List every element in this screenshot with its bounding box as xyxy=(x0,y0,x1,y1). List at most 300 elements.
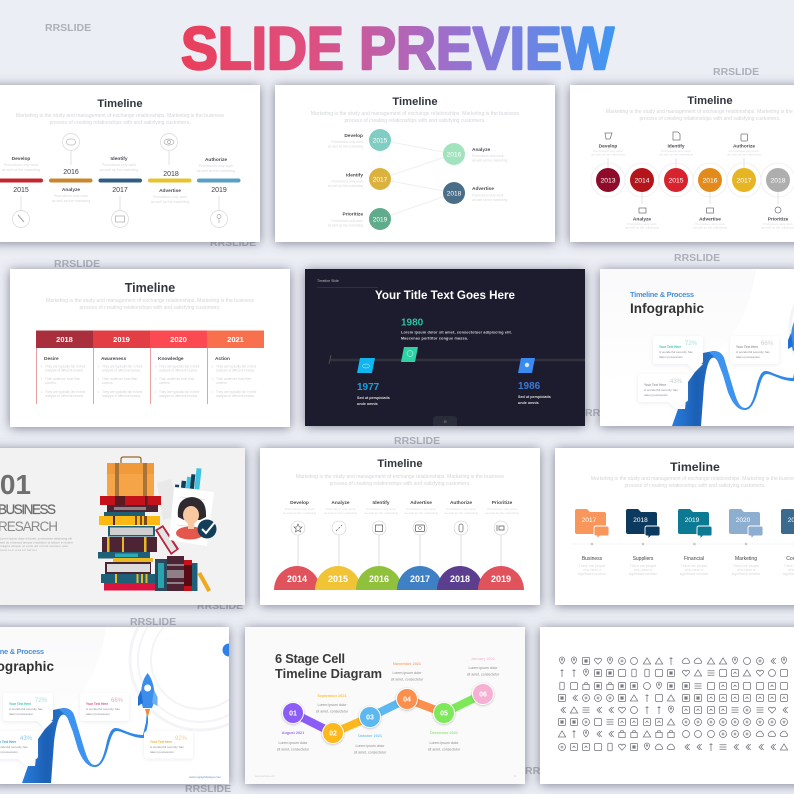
column: awareness xyxy=(98,356,144,398)
watermarks: RRSLIDE xyxy=(585,407,631,419)
illustration: book stack xyxy=(98,496,161,590)
callout: 66 percent: taken possession xyxy=(736,355,760,359)
callout: 43 percent: A wonderful serenity has xyxy=(644,388,678,392)
icon row 8 xyxy=(558,743,788,751)
month captions xyxy=(277,657,500,754)
stage labels: Authorize xyxy=(205,157,227,163)
column dividers xyxy=(36,348,208,404)
stage labels: Authorize xyxy=(450,500,472,506)
month captions: Lorem ipsum dolor xyxy=(279,741,308,745)
numbered nodes: 04 xyxy=(403,696,411,704)
month captions: Lorem ipsum dolor xyxy=(318,703,347,707)
panel: six stage cell diagram xyxy=(245,627,525,784)
subtitle text: process of creating relationships with and satisfying customers. xyxy=(79,305,221,311)
callout: 92 percent: A wonderful serenity has xyxy=(150,745,184,749)
month captions: Lorem ipsum dolor xyxy=(356,744,385,748)
stage labels: as well as the marketing xyxy=(404,511,438,515)
slide tag: Timeline Slide xyxy=(317,279,339,283)
dotted axis xyxy=(572,543,794,545)
callout: 66 percent: 66% xyxy=(761,341,774,347)
years: 2019 xyxy=(211,187,227,194)
labels and small icons: Promotions only work xyxy=(593,149,623,153)
folder labels: Marketing xyxy=(735,556,757,562)
callout: 43 percent: Your Text Here xyxy=(644,383,666,387)
year header bar: 2018 xyxy=(56,335,73,344)
column: knowledge: analysis of different brands. xyxy=(159,368,198,372)
milestone 1986: unde omnis xyxy=(518,401,539,405)
watermarks: RRSLIDE xyxy=(394,435,440,447)
semicircle years xyxy=(274,566,524,590)
callout: 66 percent: 66% xyxy=(111,698,124,704)
left labels: Prioritize xyxy=(342,212,363,218)
pale background shape xyxy=(0,473,107,743)
illustration: briefcase xyxy=(107,457,154,496)
watermarks: RRSLIDE xyxy=(54,258,100,270)
watermarks: RRSLIDE xyxy=(674,252,720,264)
coloured timeline bars xyxy=(0,178,240,182)
subtitle text: process of creating relationships with and satisfying customers. xyxy=(639,116,781,122)
column: desire: They are typically fair in their xyxy=(45,390,87,394)
heading: infographic: Infographic xyxy=(630,301,704,316)
subtitle text: Marketing is the study and management of exchange relationships. Marketing is the business xyxy=(46,298,255,304)
folder labels: There are people xyxy=(579,564,605,568)
folder labels: who have a xyxy=(685,568,703,572)
milestone 1980: Maecenas porttitor congue massa. xyxy=(401,336,468,340)
month captions: November 2021 xyxy=(393,662,421,666)
years: 2018 xyxy=(163,171,179,178)
numbered nodes: 01 xyxy=(289,710,297,718)
right labels: as well as the marketing xyxy=(472,198,508,202)
column: action: They are typically fair in their xyxy=(216,364,258,368)
column: action: content. xyxy=(216,381,227,385)
stage labels: Promotions only work xyxy=(406,507,436,511)
semicircle years: 2016 xyxy=(369,574,389,584)
callout: 43 percent xyxy=(638,378,689,409)
column: knowledge: content. xyxy=(159,381,170,385)
month captions: August 2021 xyxy=(282,731,304,735)
column: awareness: Their audience trust their xyxy=(102,377,138,381)
footer text xyxy=(255,775,517,778)
folder 2020 xyxy=(729,509,763,545)
column: awareness: They are typically fair in their xyxy=(102,364,144,368)
stage labels: Prioritize xyxy=(492,500,513,506)
milestone 1977: Sed ut perspiciatis xyxy=(357,396,390,400)
folder labels: who have a xyxy=(737,568,755,572)
background rings xyxy=(788,304,794,356)
column: knowledge: analysis of different brands. xyxy=(159,394,198,398)
blue corner dot xyxy=(222,644,229,656)
page tab xyxy=(433,416,457,426)
column: knowledge: Knowledge xyxy=(158,356,184,362)
diagram heading xyxy=(275,651,382,681)
column: desire: They are typically fair in their xyxy=(45,364,87,368)
stage labels: Develop xyxy=(12,156,30,162)
labels and small icons: Promotions only work xyxy=(627,222,657,226)
year circles: 2017 xyxy=(373,176,388,184)
stage labels: Analyze xyxy=(331,500,350,506)
section body text: sed do eiusmod tempor incididunt ut labore et dolore xyxy=(0,540,73,544)
callout: 66 percent xyxy=(730,336,779,364)
folder labels: significant number xyxy=(578,572,607,576)
stage labels: as well as the marketing xyxy=(444,511,478,515)
section number: 01 xyxy=(0,469,31,500)
folder labels: There are people xyxy=(733,564,759,568)
milestone 1980 xyxy=(401,318,512,362)
watermarks: RRSLIDE xyxy=(45,22,91,34)
month captions: sit amet, consectetur xyxy=(316,710,349,714)
labels and small icons: as well as the marketing xyxy=(727,152,761,156)
stage labels: Promotions only work xyxy=(54,194,88,198)
year header bar: 2019 xyxy=(113,335,130,344)
year circles: 2019 xyxy=(373,216,388,224)
labels and small icons: Promotions only work xyxy=(729,149,759,153)
years: 2015 xyxy=(13,187,29,194)
callout: 66 percent: Your Text Here xyxy=(736,345,758,349)
stage labels: Promotions only work xyxy=(153,195,187,199)
subtitle text: Marketing is the study and management of exchange relationships. Marketing is the business xyxy=(296,474,505,480)
panel: icon set xyxy=(540,627,794,784)
labels and small icons: as well as the marketing xyxy=(659,152,693,156)
panel: timeline with bars xyxy=(0,85,260,242)
labels and small icons: Prioritize xyxy=(768,216,789,222)
numbered nodes xyxy=(282,684,494,744)
subtitle text: process of creating relationships with and satisfying customers. xyxy=(49,120,191,126)
labels and small icons: Promotions only work xyxy=(695,222,725,226)
year circles xyxy=(596,168,790,192)
column: desire: analysis of different brands. xyxy=(45,368,84,372)
diagram heading: 6 Stage Cell xyxy=(275,651,345,666)
left labels: as well as the marketing xyxy=(328,184,363,188)
years xyxy=(13,169,227,194)
year circles: 2018 xyxy=(770,178,786,184)
callout: 66 percent: Your Text Here xyxy=(86,702,108,706)
column: action: They are typically fair in their xyxy=(216,390,258,394)
folder 2017 xyxy=(575,509,609,545)
stage labels xyxy=(2,156,235,204)
folder labels: There are people xyxy=(630,564,656,568)
rocket fragment xyxy=(788,322,794,351)
stage labels: Advertise xyxy=(410,500,432,506)
column: desire: Their audience trust their xyxy=(45,377,81,381)
month captions: sit amet, consectetur xyxy=(391,678,424,682)
stage labels: as well as the marketing xyxy=(364,511,398,515)
watermarks: RRSLIDE xyxy=(713,66,759,78)
column: awareness: analysis of different brands. xyxy=(102,368,141,372)
semicircle years: 2018 xyxy=(450,574,470,584)
callout: 43 percent: taken possession xyxy=(644,393,668,397)
callout: 72 percent: Your Text Here xyxy=(659,345,681,349)
subtitle text xyxy=(591,476,794,489)
column: awareness: analysis of different brands. xyxy=(102,394,141,398)
labels and small icons: Advertise xyxy=(699,216,721,222)
column: action: analysis of different brands. xyxy=(216,368,255,372)
year circles: 2014 xyxy=(634,178,650,184)
footer link: www.ngraphdesign.com xyxy=(189,775,221,779)
subtitle text xyxy=(16,113,225,126)
footer text: 11 xyxy=(514,775,517,778)
panel: business research xyxy=(0,448,245,605)
left labels: as well as the marketing xyxy=(328,224,363,228)
labels and small icons: Promotions only work xyxy=(763,222,793,226)
callout: 66 percent: A wonderful serenity has xyxy=(86,707,120,711)
left labels: Develop xyxy=(344,133,363,139)
panel: rocket infographic xyxy=(0,620,236,793)
connector bars xyxy=(293,694,483,733)
stage labels: as well as the marketing xyxy=(283,511,316,515)
stage labels: as well as the marketing xyxy=(52,199,90,203)
year circles: 2016 xyxy=(702,178,718,184)
background rings xyxy=(128,627,229,732)
column: knowledge xyxy=(155,356,201,398)
column: desire: content. xyxy=(45,381,56,385)
year circles: 2013 xyxy=(600,178,616,184)
labels and small icons: Analyze xyxy=(633,216,651,222)
panel: ribbon infographic xyxy=(592,262,794,435)
right labels: Analyze xyxy=(472,147,490,153)
column: awareness: They are typically fair in their xyxy=(102,390,144,394)
milestone 1977: 1977 xyxy=(357,382,380,393)
left labels: as well as the marketing xyxy=(328,144,363,148)
heading: process: Timeline & Process xyxy=(630,290,694,299)
stage labels: as well as the marketing xyxy=(324,511,357,515)
month captions: sit amet, consectetur xyxy=(428,748,461,752)
labels and small icons: as well as the marketing xyxy=(625,226,659,230)
callout: 43 percent xyxy=(0,736,39,766)
illustration: profile card xyxy=(169,488,216,546)
subtitle text xyxy=(296,474,505,487)
subtitle text xyxy=(311,111,520,124)
numbered nodes: 06 xyxy=(479,692,487,698)
subtitle text xyxy=(46,298,255,311)
watermarks: RRSLIDE xyxy=(197,600,243,612)
right labels: Promotions only work xyxy=(472,194,504,198)
icon row 5 xyxy=(561,706,788,714)
milestone 1977 xyxy=(357,358,390,406)
year circles xyxy=(369,129,465,230)
folder labels: Suppliers xyxy=(633,556,654,562)
left labels xyxy=(328,133,363,228)
callout: 72 percent: 72% xyxy=(35,698,48,704)
callout: 72 percent: A wonderful serenity has xyxy=(659,350,693,354)
year circles: 2018 xyxy=(447,190,462,198)
panel: red header table timeline xyxy=(10,269,290,427)
stage labels: as well as the marketing xyxy=(197,169,235,173)
folder labels: who have a xyxy=(583,568,601,572)
labels and small icons xyxy=(591,132,794,230)
stage labels: Promotions only work xyxy=(285,507,315,511)
month captions: Lorem ipsum dolor xyxy=(393,671,422,675)
milestone 1980: 1980 xyxy=(401,318,424,329)
section body text: nostrud exercitation xyxy=(0,548,37,552)
year circles: 2016 xyxy=(447,152,462,158)
stage labels: Analyze xyxy=(62,187,80,193)
semicircle years: 2014 xyxy=(287,574,307,584)
stage labels: as well as the marketing xyxy=(151,200,189,204)
right labels: Advertise xyxy=(472,186,494,192)
folder labels: significant number xyxy=(680,572,709,576)
rocket xyxy=(138,673,158,718)
subtitle text: process of creating relationships with and satisfying customers. xyxy=(624,483,766,489)
callout: 43 percent: 43% xyxy=(670,379,683,385)
illustration: back paper xyxy=(157,479,180,520)
stage labels: as well as the marketing xyxy=(485,511,519,515)
heading: timeline: Timeline xyxy=(687,95,733,107)
panel: semicircle timeline xyxy=(260,448,540,605)
icon row 1 xyxy=(559,657,787,665)
right labels: as well as the marketing xyxy=(472,158,508,162)
numbered nodes: 03 xyxy=(366,714,374,722)
panel: dark timeline slide xyxy=(305,269,585,426)
page tab: 10 xyxy=(443,420,447,424)
folder 2020: 2020 xyxy=(736,517,751,524)
right labels: Promotions only work xyxy=(472,154,504,158)
folder labels: who have a xyxy=(634,568,652,572)
diagram heading: Timeline Diagram xyxy=(275,666,382,681)
folder 2017: 2017 xyxy=(582,517,597,524)
milestone 1980: Lorem ipsum dolor sit amet, consectetuer adipiscing elit. xyxy=(401,330,512,334)
month captions: sit amet, consectetur xyxy=(277,748,310,752)
year header bar: 2020 xyxy=(170,335,187,344)
column: desire: Desire xyxy=(44,356,59,362)
illustration: side books xyxy=(155,525,211,592)
icon row 4 xyxy=(558,694,788,702)
folder 2018 xyxy=(626,509,660,545)
labels and small icons: as well as the marketing xyxy=(761,226,794,230)
numbered nodes: 05 xyxy=(440,710,448,718)
folder 2019: 2019 xyxy=(685,517,700,524)
year circles: 2017 xyxy=(736,178,752,184)
labels and small icons: Develop xyxy=(599,144,617,150)
callout: 92 percent xyxy=(144,731,193,758)
panel: ringed circle timeline xyxy=(570,85,794,242)
month captions: Lorem ipsum dolor xyxy=(469,666,498,670)
milestone 1986 xyxy=(518,358,551,405)
heading: timeline: Timeline xyxy=(392,96,438,108)
folder labels: significant number xyxy=(732,572,761,576)
folder 2018: 2018 xyxy=(633,517,648,524)
footer text: www.website.com xyxy=(255,775,275,778)
icon row 3 xyxy=(560,682,788,690)
line icons xyxy=(12,134,228,228)
milestone 1986: Sed ut perspiciatis xyxy=(518,395,551,399)
blue ribbon xyxy=(22,708,148,783)
month captions: sit amet, consectetur xyxy=(467,672,500,676)
folder labels: There are people xyxy=(681,564,707,568)
month captions: October 2021 xyxy=(358,734,382,738)
subtitle text: Marketing is the study and management of exchange relationships. Marketing is the business xyxy=(591,476,794,482)
section body text: magna aliqua ut enim ad minim veniam quis xyxy=(0,544,69,548)
watermarks: RRSLIDE xyxy=(525,765,571,777)
left labels: Promotions only work xyxy=(331,219,363,223)
connecting lines xyxy=(380,140,454,219)
stage labels: Advertise xyxy=(159,188,181,194)
watermarks: RRSLIDE xyxy=(130,616,176,628)
years: 2017 xyxy=(112,187,128,194)
month captions: Lorem ipsum dolor xyxy=(430,741,459,745)
year circles: 2015 xyxy=(668,178,684,184)
section body text: Lorem ipsum dolor sit amet, consectetur adipiscing elit xyxy=(0,536,72,540)
column: action: Action xyxy=(215,356,230,362)
milestone 1977: unde omnis xyxy=(357,402,378,406)
labels and small icons: as well as the marketing xyxy=(693,226,727,230)
stage labels: as well as the marketing xyxy=(2,168,40,172)
column: action: analysis of different brands. xyxy=(216,394,255,398)
left labels: Identify xyxy=(346,172,363,178)
main title: SLIDE PREVIEW xyxy=(181,15,614,82)
section title xyxy=(0,502,58,534)
folder labels: Financial xyxy=(684,556,704,562)
callout: 92 percent: Your Text Here xyxy=(150,740,172,744)
milestone 1986: 1986 xyxy=(518,381,541,392)
right labels xyxy=(472,147,508,202)
stage labels: as well as the marketing xyxy=(100,168,138,172)
dark slide title: Your Title Text Goes Here xyxy=(375,288,515,302)
watermarks: RRSLIDE xyxy=(210,237,256,249)
column: awareness: Awareness xyxy=(101,356,127,362)
icon stems xyxy=(298,535,501,568)
column: knowledge: They are typically fair in their xyxy=(159,390,201,394)
subtitle text: Marketing is the study and management of exchange relationships. Marketing is the business xyxy=(311,111,520,117)
rings and connectors xyxy=(591,158,794,204)
stage labels: Promotions only work xyxy=(4,163,38,167)
stage labels: Identify xyxy=(372,500,390,506)
folder labels: Business xyxy=(582,556,603,562)
stage labels: Promotions only work xyxy=(102,163,136,167)
callout: 66 percent xyxy=(80,693,129,721)
month captions: January 2022 xyxy=(471,657,495,661)
subtitle text: Marketing is the study and management of exchange relationships. Marketing is the business xyxy=(16,113,225,119)
icon row 2 xyxy=(560,669,788,677)
folder labels: significant number xyxy=(629,572,658,576)
semicircle years: 2017 xyxy=(410,574,430,584)
year header bar: 2021 xyxy=(227,335,244,344)
heading: timeline: Timeline xyxy=(125,281,175,295)
month captions: September 2021 xyxy=(317,694,347,698)
year circles: 2015 xyxy=(373,138,388,144)
subtitle text xyxy=(606,109,794,122)
stage labels: Promotions only work xyxy=(199,164,233,168)
pale background shape xyxy=(533,115,757,385)
blue ribbon xyxy=(672,351,794,426)
subtitle text: process of creating relationships with and satisfying customers. xyxy=(344,118,486,124)
callout: 92 percent: 92% xyxy=(175,736,188,742)
panel: zigzag circle timeline xyxy=(275,85,555,242)
labels and small icons: Promotions only work xyxy=(661,149,691,153)
callout: 92 percent: taken possession xyxy=(150,750,174,754)
icons in circles xyxy=(291,521,508,535)
column: action xyxy=(212,356,258,398)
illustration: small bar chart xyxy=(175,466,202,490)
column: desire: analysis of different brands. xyxy=(45,394,84,398)
labels and small icons: Identify xyxy=(667,144,685,150)
callout: 72 percent xyxy=(3,693,53,729)
callout: 43 percent: 43% xyxy=(20,736,33,742)
heading: timeline: Timeline xyxy=(670,460,720,474)
column: knowledge: They are typically fair in their xyxy=(159,364,201,368)
column: desire xyxy=(41,356,87,398)
stage labels: Promotions only work xyxy=(366,507,396,511)
stage labels: Promotions only work xyxy=(487,507,517,511)
callout: 72 percent: 72% xyxy=(685,341,698,347)
years: 2016 xyxy=(63,169,79,176)
callout: 72 percent xyxy=(653,336,703,372)
callout: 66 percent: taken possession xyxy=(86,712,110,716)
icon row 6 xyxy=(558,718,788,726)
stage labels: Identify xyxy=(110,156,128,162)
column: awareness: content. xyxy=(102,381,113,385)
heading: timeline: Timeline xyxy=(97,98,143,110)
month captions: December 2021 xyxy=(430,731,458,735)
